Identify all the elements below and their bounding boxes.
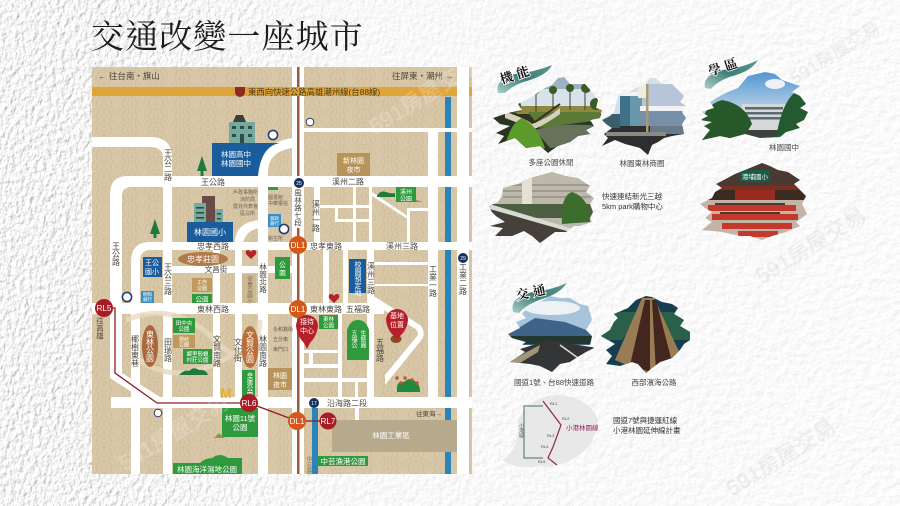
station: DL1 north [289,236,307,254]
photo: shopping district [602,78,686,155]
school site reserved: 校園預定地 [354,260,362,296]
expressway band [92,87,472,97]
faint arcs around east forest park [126,313,260,373]
park: Donglin small: 公園 [323,322,334,330]
route map: Xiaogang Linyuan extension: RL5 [538,459,546,464]
park blob: Donglin: 東林公園 [146,329,154,363]
park: small green: 園 [279,269,286,277]
tan park: Gongzuo: 工作 [197,279,207,286]
road labels: 往東海→ [416,409,442,418]
watermarks: 591房屋交易 [114,389,233,476]
route map: Xiaogang Linyuan extension: 小港林園線 [566,423,599,432]
photo: west coast highway [599,295,691,375]
panel: location map [92,67,472,475]
night market: Xinlinyuan [337,153,370,176]
road labels: 溪州二路 [332,176,364,186]
rivers: blue canals [312,97,451,474]
watermarks: 591房屋交易 [751,202,870,289]
road labels: 五分車 [273,336,288,343]
park: Donglin small [319,315,338,330]
bank blue tag: 銀行 [143,296,152,303]
school: Linyuan high school [212,143,280,176]
road labels: 溪州三路 [366,261,376,294]
road labels [95,149,468,475]
caption: junior high: 林園國中 [769,142,799,152]
road labels: 東林東路 [310,304,342,314]
park: Zhongyun fishing port: 中芸漁港公園 [320,456,366,466]
caption: shopping district: 林園東林商圈 [620,158,664,168]
tan park: Gongzuo [192,278,212,292]
park: small green [275,257,290,279]
brush heading: amenities: 機能 [497,59,536,88]
photo: national highway 1 [508,296,594,372]
road labels: 五福路 [346,304,370,314]
school: Wanggong elementary [143,257,162,277]
road labels: 忠孝東路 [310,241,342,251]
caption: parks: 多座公園休閒 [528,157,574,167]
expressway label: 東西向快速公路高雄潮州線(台88線) [248,87,380,97]
school: Wanggong elementary: 國小 [145,267,159,276]
road labels: 文化街 [234,337,242,363]
photo: junior high [698,70,810,142]
night market: Linyuan: 夜市 [273,380,287,389]
direction label: Tainan: ← 往台南‧旗山 [98,71,160,81]
photo: Gangpu elementary [700,163,807,240]
road labels: 往高雄 [95,316,104,341]
metro red line extension [104,308,328,421]
small civic facilities list: 農兆代表會 [233,203,258,210]
caption: route extension [613,415,681,435]
station: RL6: RL6 [242,399,257,408]
bank tag: 郵政 [270,215,279,222]
road labels: 王公路 [112,242,120,266]
icon: bushes [179,368,208,375]
park blob: Wenxian: 文賢公園 [246,330,254,364]
park: Linyuan No. 11: 林園11號 [225,413,256,423]
pin: base location [386,309,408,343]
road labels: 溪州一路 [312,199,320,232]
brush heading: school district: 學區 [704,51,744,80]
road labels: 溪州三路 [386,241,418,251]
night market: Linyuan [268,368,292,390]
station: DL1 south: DL1 [290,417,305,426]
park blob: Zhongxiao [178,252,228,266]
caption: route extension: 國道7號與捷運紅線 [613,415,678,425]
park: Tuanjie [173,335,195,348]
route badges: 17 [311,401,317,407]
pin: reception center [296,315,318,349]
Linyuan park north vertical: 安泰公園小 [246,275,253,305]
road labels: 沿海路二段 [327,398,367,408]
school: Linyuan high school: 林園國中 [221,158,251,168]
park: ocean wetland [173,455,242,474]
small civic facilities list: 中華電信 [268,200,288,207]
small civic facilities list: 消防局 [240,196,255,203]
icon: trees [150,156,207,238]
road labels: 文賢南路 [212,334,222,367]
station: DL1 south [288,412,306,430]
park: Xingfu [242,370,255,399]
icon: elementary building [194,196,223,222]
road labels: 王公二路 [164,149,172,181]
school: Wanggong elementary: 王公 [145,259,159,267]
main road brown line [297,67,300,474]
park: Linyuan No. 11 [214,408,258,438]
road network [92,67,472,474]
caption: Shinkong Mitsukoshi [602,191,663,211]
road labels: 田瑞路 [164,338,172,362]
park: Tianzhongyang [173,318,195,333]
park: Tianzhongyang: 公園 [178,326,190,333]
road labels: 工業二路 [458,263,468,295]
caption: west coast highway: 西部濱海公路 [632,377,677,387]
watermarks: 591房屋交易 [786,17,884,88]
road labels: 永和路街 [273,326,293,333]
park: Wufu [347,320,369,360]
caption: Shinkong Mitsukoshi: 快速連結新光三越 [602,191,662,201]
park blob: Donglin [142,325,158,367]
title: 交通改變一座城市 [91,11,364,58]
road labels: 王公三路 [164,263,172,295]
station: RL5: RL5 [97,304,112,313]
bank tag: 銀行 [270,220,279,227]
icon: high school building [229,115,255,143]
icon: hearts [246,250,339,303]
park: Wufu: 生態園 [359,329,366,349]
park: Linyuan No. 11: 公園 [232,423,248,432]
route map: Xiaogang Linyuan extension: 小港線 [518,422,524,438]
route map: Xiaogang Linyuan extension: RL2 [562,416,570,421]
icon: MRT roundels [122,118,314,417]
park: Wufu: 五福公 [350,330,357,349]
watermarks: 591房屋交易 [721,414,840,501]
icon: flower bush [395,376,420,392]
park: Tuanjie: 公園 [179,342,189,348]
park: Xizhou [377,187,423,203]
park: Xizhou: 公園 [400,196,412,203]
road labels: 文昌街 [205,264,228,274]
small civic facilities list: 圖書館 [268,194,283,201]
caption: national highway 1: 國道1號、台88快速道路 [514,377,595,387]
park blob: Zhongxiao: 忠孝莊園 [187,254,219,264]
road labels: 王公路 [201,177,225,187]
park: village: 村莊公園 [186,356,209,364]
school: Linyuan elementary [187,222,233,242]
green park: small [192,294,212,304]
road labels: 五福路 [376,338,384,362]
tan park: Gongzuo: 公園 [197,286,207,292]
direction label: Pingtung: 往屏東‧潮州 → [392,71,454,81]
station: DL1 middle: DL1 [291,305,306,314]
watermarks: 591房屋交易 [364,52,483,139]
Linyuan park north vertical [242,274,256,305]
road labels: 椰樹東巷 [130,334,140,367]
station: RL6 [240,394,258,412]
brush heading: school district [704,51,758,89]
school: Linyuan high school: 林園高中 [221,149,251,159]
route map: Xiaogang Linyuan extension: RL4 [541,444,549,449]
road labels: 中芸路 [305,455,312,475]
station: RL5 [95,299,113,317]
photo: parks [493,77,602,153]
caption: Shinkong Mitsukoshi: 5km park購物中心 [602,201,663,211]
brush heading: transport [512,278,567,313]
badge: 88 [235,87,245,97]
pin: base location: 基地 [390,311,404,320]
route map: Xiaogang Linyuan extension: RL3 [547,433,555,438]
icon: McDonald's: M [220,385,232,401]
route map: Xiaogang Linyuan extension [502,395,599,467]
small civic facilities list: 區公所 [240,210,255,217]
station: DL1 middle [289,300,307,318]
park: Tuanjie: 團結 [179,336,189,343]
small civic facilities list: 戶政事務所 [233,189,258,196]
road labels: 風林路七段 [293,189,302,228]
station: RL7: RL7 [321,417,336,426]
bank blue tag: 明和 [143,291,152,298]
road labels: 工業一路 [428,265,438,297]
photo: Shinkong Mitsukoshi [486,170,596,245]
park: ocean wetland: 林園海洋濕地公園 [177,464,237,474]
pin: reception center: 接待 [300,317,314,326]
pin: reception center: 中心 [300,326,314,335]
night market: Xinlinyuan: 新林園 [343,156,364,165]
park: small green: 公 [279,261,286,269]
green park: small: 公園 [196,296,208,304]
park: village [183,349,212,364]
small civic facilities list [233,187,288,242]
park: Xingfu: 幸運公園 [245,372,253,399]
route badges [294,178,468,408]
night market: Linyuan: 林園 [273,371,287,380]
bank tag [268,214,281,227]
caption: route extension: 小港林園延伸線計畫 [613,425,681,435]
photo: Gangpu elementary: 港埔國小 [742,172,768,181]
bank blue tag [141,291,154,303]
park blob: Wenxian [242,326,258,368]
brush heading: amenities [497,59,552,93]
road labels: 東林西路 [197,304,229,314]
small civic facilities list: 衛生所 [268,235,283,242]
station: RL7 [320,412,336,430]
pin: base location: 位置 [390,320,404,329]
route badges: 25 [296,181,302,187]
night market: Xinlinyuan: 夜市 [346,165,360,174]
school site reserved [349,259,366,296]
road labels: 忠孝西路 [197,241,229,251]
school: Linyuan elementary: 林園國小 [194,227,226,237]
route badges: 29 [460,256,466,262]
area: industrial zone [332,420,457,452]
park: village: 鄉里殼蠟 [186,350,209,358]
park: Tianzhongyang: 田中央 [176,319,193,327]
station: DL1 north: DL1 [291,241,306,250]
park: Donglin small: 東林 [323,315,334,323]
road labels: 林園北路 [258,262,268,293]
brush heading: transport: 交通 [514,278,551,304]
area: industrial zone: 林園工業區 [372,430,410,440]
road labels: 林園南路 [258,334,268,367]
park: Xizhou: 溪州 [400,188,412,196]
route map: Xiaogang Linyuan extension: RL1 [550,401,558,406]
road labels: 東門口 [273,346,288,353]
